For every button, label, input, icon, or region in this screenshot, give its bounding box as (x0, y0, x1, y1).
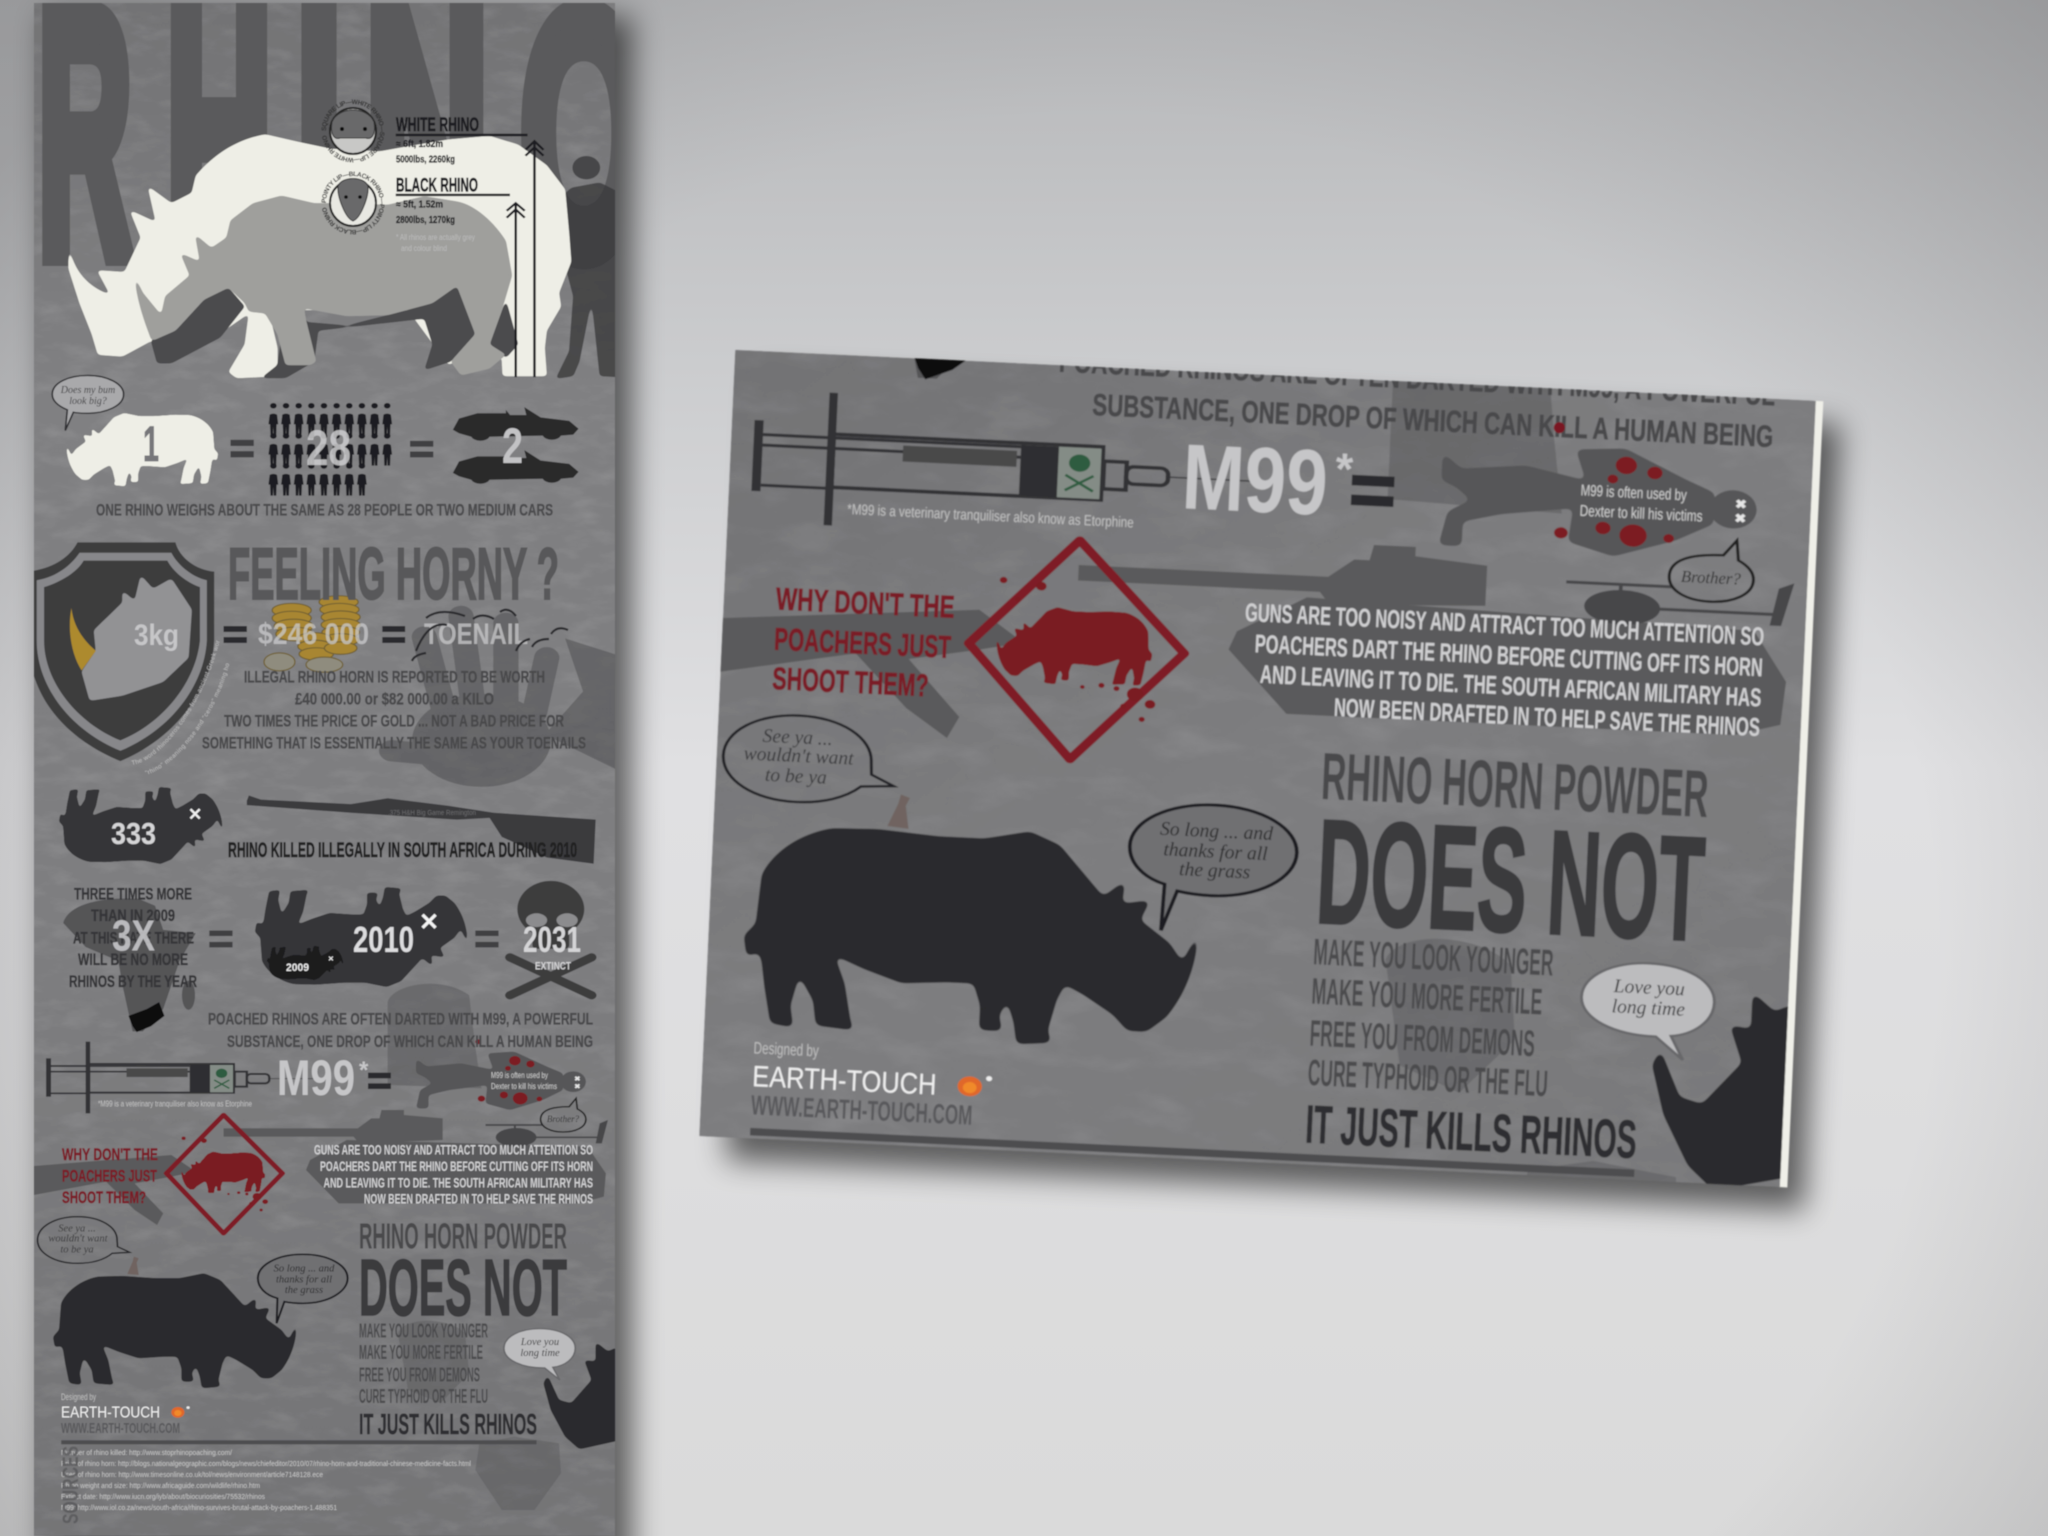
icon: black rhino lip: POINTY LIP—BLACK RHINO—POINTY LIP—BLACK RHINO (321, 171, 385, 235)
text: guns: NOW BEEN DRAFTED IN TO HELP SAVE THE RHINOS (364, 1190, 593, 1206)
X mark small: ✕ (328, 956, 334, 963)
texts: lower: MAKE YOU MORE FERTILE (359, 1342, 483, 1364)
shield with rhino head (29, 542, 214, 761)
bubble text: so long: So long ... and (274, 1264, 335, 1275)
print text: guns: POACHERS DART THE RHINO BEFORE CUTTING OFF ITS HORN (1254, 629, 1763, 682)
number: 333: 333 (111, 816, 156, 851)
print bubble text: see ya: See ya ... (762, 726, 833, 750)
print note: Dexter: M99 is often used by (1580, 482, 1687, 504)
print heading: why: WHY DON'T THE (775, 581, 955, 625)
print heading: why: POACHERS JUST (773, 621, 952, 665)
texts: upper: FEELING HORNY ? (228, 534, 559, 615)
print list: FREE YOU FROM DEMONS (1309, 1012, 1536, 1064)
text: three times more (69, 886, 197, 991)
texts: lower (48, 1033, 593, 1524)
Africa map and hand print (63, 899, 481, 1088)
people pictogram: 28 (268, 403, 392, 496)
black rhino silhouette (135, 196, 512, 375)
logo: Earth-Touch: EARTH-TOUCH (61, 1405, 160, 1422)
text: three times more: AT THIS RATE THERE (73, 930, 194, 948)
AK rifle silhouette (34, 1155, 196, 1225)
heading: rhino horn powder: RHINO HORN POWDER (359, 1215, 567, 1256)
bubble text: see ya: to be ya (60, 1245, 94, 1256)
oxpecker bird (127, 1257, 139, 1275)
url: WWW.EARTH-TOUCH.COM (61, 1420, 180, 1437)
hand prints (392, 616, 614, 787)
helicopter (486, 1120, 608, 1147)
bubble text: see ya: See ya ... (58, 1224, 96, 1235)
bubble text: see ya: wouldn't want (48, 1234, 109, 1245)
lower artwork (34, 899, 628, 1510)
note: Dexter (491, 1070, 557, 1091)
text: guns: POACHERS DART THE RHINO BEFORE CUTTING OFF ITS HORN (320, 1158, 593, 1174)
number: 28 people: 28 (306, 420, 351, 476)
sources list: Price of rhino horn: http://blogs.nationalgeographic.com/blogs/news/chiefeditor/2010/07/rhino-horn-and-traditional-chinese-medicine-facts.html (61, 1461, 471, 1468)
text: horn value: ILLEGAL RHINO HORN IS REPORTED TO BE WORTH (244, 669, 545, 687)
speech bubble: does my bum (52, 375, 124, 431)
text: poached: POACHED RHINOS ARE OFTEN DARTED WITH M99, A POWERFUL (208, 1010, 593, 1028)
rifle (247, 796, 596, 864)
print number: M99: M99 (1180, 424, 1330, 535)
text: horn value: TWO TIMES THE PRICE OF GOLD ... NOT A BAD PRICE FOR (224, 713, 564, 731)
equals sign: M99 (368, 1073, 391, 1089)
texts: lower: DOES NOT (359, 1243, 567, 1332)
note: Dexter: Dexter to kill his victims (491, 1081, 557, 1091)
print logo: EARTH-TOUCH (752, 1060, 937, 1102)
upper artwork traced on a scaled grid (52, 134, 620, 496)
rifle label: .375 H&H Big Game Remington (388, 810, 476, 817)
note: Dexter: M99 is often used by (491, 1070, 549, 1080)
print text: guns: NOW BEEN DRAFTED IN TO HELP SAVE THE RHINOS (1333, 692, 1761, 742)
texts: lower: FREE YOU FROM DEMONS (359, 1365, 480, 1387)
X mark big: ✕ (419, 909, 439, 936)
number: 2010: 2010 (353, 919, 414, 960)
footnote: colour: * All rhinos are actually grey (396, 233, 475, 242)
credit: designed by: Designed by (61, 1392, 96, 1402)
list: does not (359, 1321, 488, 1408)
right print shadow (726, 376, 1840, 1210)
panel: tilted enlarged print: CURE TYPHOID OR THE FLU (1307, 1051, 1549, 1104)
curved note on rhino horn name: "rhino" meaning nose and "ceros" meaning horn (144, 663, 230, 774)
icon: white rhino lip: SQUARE LIP—WHITE RHINO—SQUARE LIP—WHITE RHINO (321, 99, 385, 164)
print url: WWW.EARTH-TOUCH.COM (750, 1090, 973, 1131)
print heading: why: SHOOT THEM? (772, 660, 929, 703)
heading: why don't poachers shoot: POACHERS JUST (62, 1167, 157, 1186)
rhino head corner (543, 1342, 628, 1449)
syringe (46, 1042, 322, 1113)
speech bubble: so long (258, 1254, 348, 1323)
curved note on rhino horn name: The word rhinoceros comes from ancient Greek words (131, 640, 220, 765)
text: horn value (202, 669, 586, 753)
asterisk: * (359, 1057, 369, 1084)
number: 1 rhino: 1 (143, 416, 159, 472)
print text: guns (1240, 597, 1765, 742)
panel: tilted enlarged print: MAKE YOU MORE FERTILE (1311, 970, 1543, 1023)
print credit: Designed by (753, 1038, 820, 1060)
sources list: Uses of rhino horn: http://www.timesonline.co.uk/tol/news/environment/article7148128.ece (61, 1472, 323, 1479)
heading: why don't poachers shoot (62, 1145, 158, 1207)
dead rhino: 2009 (267, 946, 343, 980)
label: extinct: EXTINCT (535, 960, 571, 972)
bubble text: so long: thanks for all (276, 1275, 332, 1286)
footnote: colour second line: and colour blind (401, 244, 447, 253)
skull and crossbones (510, 881, 592, 995)
number: 2 cars: 2 (502, 418, 523, 474)
upper-middle artwork (29, 542, 614, 1044)
print note: M99: *M99 is a veterinary tranquiliser also know as Etorphine (847, 502, 1134, 532)
print bubble text: love you: long time (1611, 996, 1686, 1021)
claws over toenail (412, 610, 568, 661)
number: 3kg: 3kg (134, 619, 179, 652)
heading: it just kills rhinos: IT JUST KILLS RHINOS (359, 1409, 537, 1441)
heading: black rhino: BLACK RHINO (396, 176, 478, 196)
number: 2031: 2031 (523, 919, 581, 960)
panel: tilted enlarged print (694, 123, 1851, 1307)
dead rhino: 333 (59, 787, 223, 864)
curved note on rhino horn name (131, 640, 230, 774)
victim silhouette (416, 1052, 563, 1110)
height arrows (396, 135, 543, 377)
print note: Dexter (1579, 482, 1704, 526)
equals signs (231, 440, 433, 457)
blood spatter (478, 1056, 542, 1104)
panel: full infographic strip (33, 2, 616, 1536)
label: toenail: TOENAIL (424, 618, 528, 651)
orange logo dot (171, 1406, 190, 1418)
sources list (61, 1450, 471, 1512)
bubble text: brother: Brother? (547, 1114, 580, 1124)
tank silhouette (224, 1110, 606, 1203)
text: substance: SUBSTANCE, ONE DROP OF WHICH CAN KILL A HUMAN BEING (227, 1033, 593, 1051)
person silhouette (556, 156, 616, 378)
equals signs (224, 626, 405, 643)
red rhino (181, 1152, 265, 1193)
text: three times more: RHINOS BY THE YEAR (69, 973, 197, 991)
note: M99: *M99 is a veterinary tranquiliser also know as Etorphine (98, 1100, 252, 1109)
text: three times more: WILL BE NO MORE (78, 951, 188, 969)
white rhino silhouette (69, 134, 571, 378)
title: RHINO backdrop letters (42, 2, 616, 266)
text: guns: GUNS ARE TOO NOISY AND ATTRACT TOO MUCH ATTENTION SO (314, 1141, 593, 1157)
texts: lower: CURE TYPHOID OR THE FLU (359, 1386, 488, 1408)
speech bubble: love you (504, 1329, 575, 1380)
text: guns: AND LEAVING IT TO DIE. THE SOUTH AFRICAN MILITARY HAS (324, 1174, 593, 1190)
dead rhino: 2010 (255, 887, 468, 987)
text: three times more: THREE TIMES MORE (74, 886, 192, 904)
print bubble text: brother: Brother? (1681, 567, 1742, 589)
vertical label: sources: SOURCES (58, 1446, 83, 1524)
panel: tilted enlarged print: MAKE YOU LOOK YOUNGER (1313, 930, 1555, 984)
X mark on dead rhino: ✕ (188, 805, 202, 824)
heading: why don't poachers shoot: SHOOT THEM? (62, 1188, 146, 1207)
print list (1307, 930, 1555, 1104)
black rhino grazing (53, 1273, 297, 1388)
print text: guns: GUNS ARE TOO NOISY AND ATTRACT TOO MUCH ATTENTION SO (1244, 597, 1765, 651)
stat: white rhino height: ≈ 6ft, 1.82m (396, 139, 443, 150)
sources list: Number of rhino killed: http://www.stoprhinopoaching.com/ (61, 1450, 232, 1457)
divider bar (61, 1440, 537, 1444)
caption: weight comparison: ONE RHINO WEIGHS ABOUT THE SAME AS 28 PEOPLE OR TWO MEDIUM CARS (96, 500, 553, 520)
stat: white rhino weight: 5000lbs, 2260kg (396, 154, 455, 166)
gold coins (264, 596, 360, 672)
print bubble text: love you: Love you (1612, 976, 1685, 1000)
rhino leg shadows (151, 286, 518, 378)
stat: black rhino weight: 2800lbs, 1270kg (396, 215, 455, 226)
X eyes (575, 1077, 579, 1088)
bubble text: love you: long time (520, 1348, 560, 1359)
small white rhino: weight comparison (66, 413, 218, 486)
heading: white rhino: WHITE RHINO (396, 115, 479, 136)
cars pictogram (453, 407, 579, 484)
number: M99: M99 (277, 1050, 355, 1106)
print bubble text: so long: thanks for all (1163, 839, 1268, 865)
sources list: M99: http://www.iol.co.za/news/south-africa/rhino-survives-brutal-attack-by-poachers-1.488351 (61, 1505, 337, 1512)
bubble text: so long: the grass (285, 1285, 323, 1296)
bubble text: look big? (69, 396, 107, 407)
print paper edge (1778, 401, 1823, 1187)
text: guns (314, 1141, 593, 1206)
text: horn value: SOMETHING THAT IS ESSENTIALLY THE SAME AS YOUR TOENAILS (202, 735, 586, 753)
speech bubble: see ya (38, 1217, 130, 1263)
red warning diamond (166, 1115, 282, 1233)
print artwork (694, 123, 1851, 1307)
print heading: why (772, 581, 955, 704)
print heading: it just kills: IT JUST KILLS RHINOS (1304, 1095, 1638, 1170)
print asterisk: * (1334, 445, 1355, 495)
sources list: Extinct date: http://www.iucn.org/iyb/about/biocuriosities/75532/rhinos (61, 1494, 265, 1501)
red blood drop on caption (475, 1039, 481, 1044)
bubble text: love you: Love you (520, 1337, 559, 1348)
text: three times more: THAN IN 2009 (91, 907, 175, 925)
red splatter (182, 1137, 268, 1211)
number: 2009: 2009 (286, 962, 309, 974)
texts: upper (60, 116, 594, 1028)
heading: why don't poachers shoot: WHY DON'T THE (62, 1145, 158, 1164)
bubble text: Does my bum (60, 385, 115, 396)
print drop of blood (1553, 422, 1565, 433)
number: price: $246 000 (258, 618, 369, 651)
print text: guns: AND LEAVING IT TO DIE. THE SOUTH AFRICAN MILITARY HAS (1259, 659, 1762, 713)
caption: killed: RHINO KILLED ILLEGALLY IN SOUTH AFRICA DURING 2010 (228, 839, 577, 862)
stat: black rhino height: ≈ 5ft, 1.52m (396, 200, 443, 211)
speech bubble: brother (541, 1098, 586, 1132)
sources list: Rhino weight and size: http://www.africaguide.com/wildlife/rhino.htm (61, 1483, 260, 1490)
print text: substance: SUBSTANCE, ONE DROP OF WHICH CAN KILL A HUMAN BEING (1092, 388, 1774, 454)
texts: lower: MAKE YOU LOOK YOUNGER (359, 1321, 488, 1343)
print bubble text: see ya: wouldn't want (743, 743, 855, 770)
print bubble text: see ya: to be ya (764, 765, 827, 789)
print note: Dexter: Dexter to kill his victims (1579, 503, 1703, 526)
print text: poached: POACHED RHINOS ARE OFTEN DARTED WITH M99, A POWERFUL (1058, 345, 1776, 412)
left panel shadow (46, 16, 632, 1536)
print bubble text: so long: So long ... and (1160, 819, 1274, 845)
number: 3X: 3X (112, 912, 155, 960)
faint hand prints (398, 1321, 561, 1510)
text: horn value: £40 000.00 or $82 000.00 a KILO (295, 691, 494, 709)
print bubble text: so long: the grass (1179, 859, 1251, 883)
